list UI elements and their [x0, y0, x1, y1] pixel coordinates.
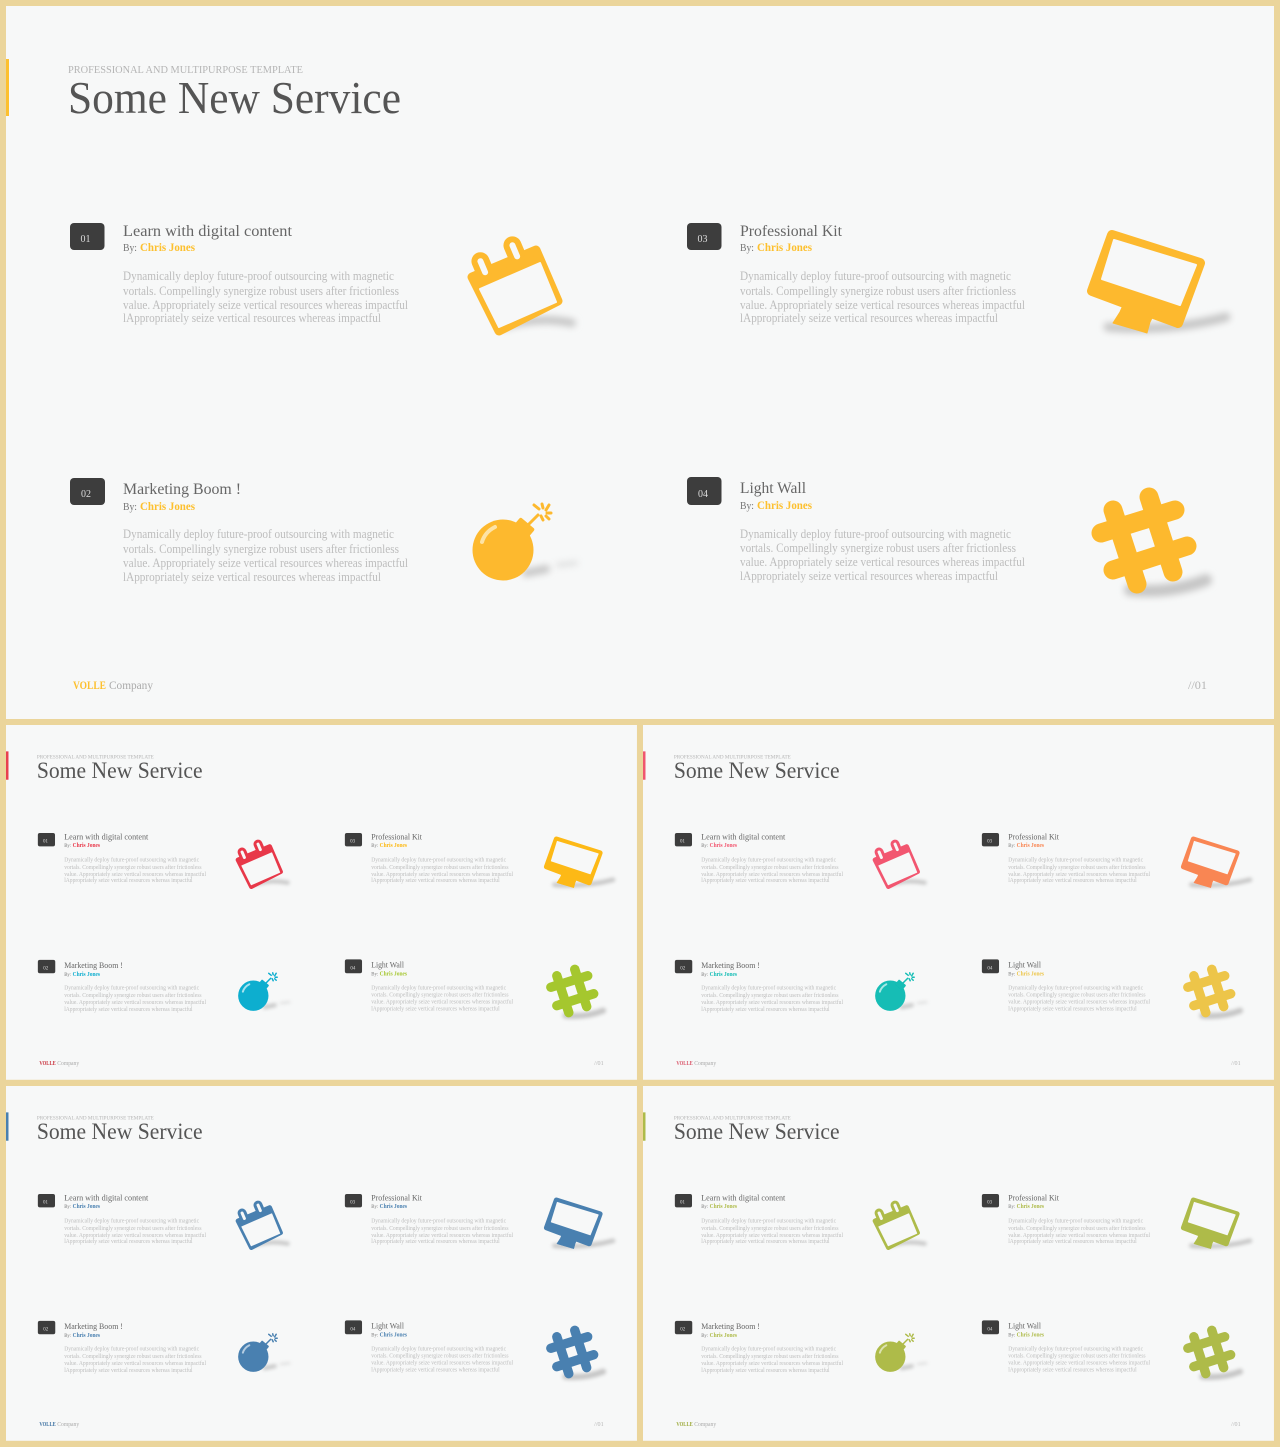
item 01: Learn with digital content: [64, 832, 149, 841]
icon: calendar: [236, 838, 288, 887]
item 01: 01: [80, 234, 90, 245]
item 03: Professional Kit: [371, 1193, 423, 1202]
item 01: 01: [43, 839, 49, 844]
icon: monitor: [1092, 235, 1226, 333]
footer brand: [676, 1422, 716, 1428]
item 04: Light Wall: [1008, 960, 1042, 969]
item 04: Dynamically deploy future-proof outsourcing with magnetic: [371, 985, 506, 992]
accent bar: [6, 1112, 8, 1141]
item 04: 04: [350, 1327, 356, 1332]
item 03: Dynamically deploy future-proof outsourcing with magnetic: [371, 1217, 506, 1224]
item 04: Dynamically deploy future-proof outsourcing with magnetic: [1008, 1346, 1143, 1353]
footer brand: Company: [694, 1061, 716, 1067]
icon: calendar: [236, 1199, 288, 1248]
item 01: lAppropriately seize vertical resources whereas impactful: [701, 877, 830, 884]
item 01: vortals. Compellingly synergize robust users after frictionless: [701, 1225, 839, 1232]
item 01: Dynamically deploy future-proof outsourcing with magnetic: [123, 269, 394, 283]
item 02: vortals. Compellingly synergize robust users after frictionless: [701, 992, 839, 999]
item 04: [982, 1320, 1150, 1374]
item 04: 04: [987, 1327, 993, 1332]
icon: hash: [551, 969, 603, 1016]
item 01: 01: [680, 1200, 686, 1205]
panel: small olive slide: [643, 1086, 1274, 1441]
page number: //01: [1231, 1061, 1241, 1067]
footer brand: VOLLE: [676, 1061, 693, 1067]
item 01: Learn with digital content: [701, 832, 786, 841]
item 04: vortals. Compellingly synergize robust users after frictionless: [371, 992, 509, 999]
icon: monitor: [1183, 1200, 1250, 1249]
item 01: lAppropriately seize vertical resources whereas impactful: [64, 877, 193, 884]
item 02: Dynamically deploy future-proof outsourcing with magnetic: [64, 985, 199, 992]
item 02: lAppropriately seize vertical resources whereas impactful: [64, 1006, 193, 1013]
item 04: Chris Jones: [757, 500, 812, 512]
item 03: vortals. Compellingly synergize robust users after frictionless: [371, 1225, 509, 1232]
item 01: value. Appropriately seize vertical resources whereas impactful: [701, 1232, 843, 1239]
icon: bomb: [472, 504, 576, 580]
item 01: Dynamically deploy future-proof outsourcing with magnetic: [64, 856, 199, 863]
item 04: Chris Jones: [380, 971, 408, 977]
item 02: Chris Jones: [73, 972, 101, 978]
item 01: By:: [64, 1204, 72, 1210]
item 03: Professional Kit: [371, 832, 423, 841]
item 04: Chris Jones: [1017, 1332, 1045, 1338]
footer brand: [39, 1061, 79, 1067]
item 03: By:: [740, 242, 754, 254]
item 01: value. Appropriately seize vertical resources whereas impactful: [64, 871, 206, 878]
item 02: vortals. Compellingly synergize robust users after frictionless: [64, 1353, 202, 1360]
item 04: lAppropriately seize vertical resources whereas impactful: [371, 1006, 500, 1013]
item 01: [675, 832, 843, 884]
item 01: vortals. Compellingly synergize robust users after frictionless: [64, 864, 202, 871]
icon: bomb: [238, 1334, 290, 1372]
item 04: Dynamically deploy future-proof outsourcing with magnetic: [740, 527, 1011, 541]
accent bar: [6, 59, 9, 116]
item 03: value. Appropriately seize vertical resources whereas impactful: [1008, 871, 1150, 878]
item 03: value. Appropriately seize vertical resources whereas impactful: [371, 1232, 513, 1239]
panel: small red slide: [6, 725, 637, 1080]
item 02: lAppropriately seize vertical resources whereas impactful: [64, 1367, 193, 1374]
item 02: Dynamically deploy future-proof outsourcing with magnetic: [123, 527, 394, 541]
item 04: By:: [371, 1332, 379, 1338]
item 03: Dynamically deploy future-proof outsourcing with magnetic: [1008, 856, 1143, 863]
item 02: vortals. Compellingly synergize robust users after frictionless: [701, 1353, 839, 1360]
item 01: By:: [701, 843, 709, 849]
item 04: Light Wall: [740, 480, 807, 497]
item 04: value. Appropriately seize vertical resources whereas impactful: [371, 1360, 513, 1367]
item 03: By:: [371, 1204, 379, 1210]
item 04: Light Wall: [371, 960, 405, 969]
footer brand: Company: [694, 1422, 716, 1428]
item 03: vortals. Compellingly synergize robust users after frictionless: [1008, 1225, 1146, 1232]
item 02: 02: [680, 1327, 686, 1332]
item 01: value. Appropriately seize vertical resources whereas impactful: [701, 871, 843, 878]
item 04: lAppropriately seize vertical resources whereas impactful: [1008, 1367, 1137, 1374]
item 02: Chris Jones: [710, 972, 738, 978]
item 01: Learn with digital content: [123, 223, 293, 240]
icon: monitor: [546, 1200, 613, 1249]
icon: monitor: [1183, 839, 1250, 888]
item 01: Dynamically deploy future-proof outsourcing with magnetic: [701, 1217, 836, 1224]
icon: calendar: [873, 838, 925, 887]
item 04: value. Appropriately seize vertical resources whereas impactful: [371, 999, 513, 1006]
panel: small coral slide: [643, 725, 1274, 1080]
item 02: Chris Jones: [710, 1333, 738, 1339]
item 03: By:: [1008, 843, 1016, 849]
item 02: Dynamically deploy future-proof outsourcing with magnetic: [701, 1346, 836, 1353]
accent bar: [643, 751, 645, 780]
item 02: value. Appropriately seize vertical resources whereas impactful: [701, 999, 843, 1006]
item 02: lAppropriately seize vertical resources whereas impactful: [701, 1367, 830, 1374]
item 01: By:: [701, 1204, 709, 1210]
eyebrow text: PROFESSIONAL AND MULTIPURPOSE TEMPLATE: [37, 1115, 154, 1121]
item 01: lAppropriately seize vertical resources whereas impactful: [123, 311, 381, 325]
item 03: 03: [987, 839, 993, 844]
footer brand: Company: [109, 678, 153, 692]
item 02: Marketing Boom !: [64, 961, 123, 970]
item 03: [345, 1193, 513, 1245]
item 03: Chris Jones: [1017, 843, 1045, 849]
item 01: [675, 1193, 843, 1245]
item 04: vortals. Compellingly synergize robust users after frictionless: [371, 1353, 509, 1360]
item 03: By:: [371, 843, 379, 849]
item 03: 03: [698, 234, 708, 245]
icon: hash: [1188, 969, 1240, 1016]
item 03: vortals. Compellingly synergize robust users after frictionless: [740, 284, 1016, 298]
eyebrow text: PROFESSIONAL AND MULTIPURPOSE TEMPLATE: [37, 754, 154, 760]
footer brand: Company: [57, 1422, 79, 1428]
item 02: By:: [123, 501, 137, 513]
item 01: Chris Jones: [710, 1204, 738, 1210]
item 03: Dynamically deploy future-proof outsourcing with magnetic: [740, 269, 1011, 283]
item 02: 02: [81, 489, 91, 500]
item 01: [70, 223, 408, 325]
item 03: [687, 223, 1025, 325]
item 01: value. Appropriately seize vertical resources whereas impactful: [64, 1232, 206, 1239]
icon: bomb: [238, 973, 290, 1011]
item 02: value. Appropriately seize vertical resources whereas impactful: [123, 556, 408, 570]
item 02: [38, 960, 206, 1013]
icon: bomb: [875, 1334, 927, 1372]
icon: hash: [1101, 497, 1206, 591]
item 04: By:: [740, 500, 754, 512]
item 04: 04: [698, 489, 708, 500]
item 03: Chris Jones: [1017, 1204, 1045, 1210]
item 02: Chris Jones: [73, 1333, 101, 1339]
item 02: [675, 1321, 843, 1374]
item 02: value. Appropriately seize vertical resources whereas impactful: [64, 1360, 206, 1367]
item 02: [70, 478, 408, 584]
icon: monitor: [546, 839, 613, 888]
item 02: [675, 960, 843, 1013]
page number: //01: [594, 1422, 604, 1428]
item 02: Dynamically deploy future-proof outsourcing with magnetic: [64, 1346, 199, 1353]
item 04: Chris Jones: [1017, 971, 1045, 977]
item 01: [38, 832, 206, 884]
item 04: lAppropriately seize vertical resources whereas impactful: [371, 1367, 500, 1374]
footer brand: Company: [57, 1061, 79, 1067]
item 04: 04: [987, 966, 993, 971]
item 01: value. Appropriately seize vertical resources whereas impactful: [123, 298, 408, 312]
item 03: 03: [350, 839, 356, 844]
item 03: lAppropriately seize vertical resources whereas impactful: [740, 311, 998, 325]
item 04: lAppropriately seize vertical resources whereas impactful: [740, 569, 998, 583]
item 03: lAppropriately seize vertical resources whereas impactful: [371, 1238, 500, 1245]
item 02: Chris Jones: [140, 501, 195, 513]
item 01: 01: [680, 839, 686, 844]
icon: bomb: [875, 973, 927, 1011]
item 03: vortals. Compellingly synergize robust users after frictionless: [1008, 864, 1146, 871]
item 01: lAppropriately seize vertical resources whereas impactful: [64, 1238, 193, 1245]
item 01: vortals. Compellingly synergize robust users after frictionless: [64, 1225, 202, 1232]
item 02: 02: [43, 1327, 49, 1332]
item 01: Learn with digital content: [701, 1193, 786, 1202]
item 02: vortals. Compellingly synergize robust users after frictionless: [64, 992, 202, 999]
eyebrow text: PROFESSIONAL AND MULTIPURPOSE TEMPLATE: [674, 1115, 791, 1121]
footer brand: [39, 1422, 79, 1428]
item 02: Marketing Boom !: [701, 961, 760, 970]
item 04: value. Appropriately seize vertical resources whereas impactful: [740, 555, 1025, 569]
item 04: [982, 959, 1150, 1013]
item 04: vortals. Compellingly synergize robust users after frictionless: [740, 541, 1016, 555]
item 04: vortals. Compellingly synergize robust users after frictionless: [1008, 992, 1146, 999]
item 04: By:: [1008, 971, 1016, 977]
footer brand: [676, 1061, 716, 1067]
item 04: value. Appropriately seize vertical resources whereas impactful: [1008, 999, 1150, 1006]
item 02: [38, 1321, 206, 1374]
item 04: lAppropriately seize vertical resources whereas impactful: [1008, 1006, 1137, 1013]
item 03: value. Appropriately seize vertical resources whereas impactful: [740, 298, 1025, 312]
item 01: Chris Jones: [140, 242, 195, 254]
item 01: Dynamically deploy future-proof outsourcing with magnetic: [701, 856, 836, 863]
item 02: 02: [680, 966, 686, 971]
footer brand: VOLLE: [73, 680, 106, 692]
item 02: By:: [701, 972, 709, 978]
accent bar: [6, 751, 8, 780]
item 01: [38, 1193, 206, 1245]
item 01: Chris Jones: [73, 843, 101, 849]
item 03: 03: [987, 1200, 993, 1205]
item 03: lAppropriately seize vertical resources whereas impactful: [371, 877, 500, 884]
item 03: value. Appropriately seize vertical resources whereas impactful: [1008, 1232, 1150, 1239]
item 01: Chris Jones: [73, 1204, 101, 1210]
page number: //01: [1188, 680, 1207, 692]
item 04: Light Wall: [371, 1321, 405, 1330]
eyebrow text: PROFESSIONAL AND MULTIPURPOSE TEMPLATE: [674, 754, 791, 760]
item 02: Dynamically deploy future-proof outsourcing with magnetic: [701, 985, 836, 992]
icon: calendar: [469, 234, 572, 331]
item 03: Professional Kit: [1008, 832, 1060, 841]
icon: hash: [551, 1330, 603, 1377]
accent bar: [643, 1112, 645, 1141]
item 01: By:: [64, 843, 72, 849]
item 04: [345, 1320, 513, 1374]
title: Some New Service: [37, 758, 203, 783]
item 04: value. Appropriately seize vertical resources whereas impactful: [1008, 1360, 1150, 1367]
item 03: lAppropriately seize vertical resources whereas impactful: [1008, 877, 1137, 884]
item 03: Chris Jones: [757, 242, 812, 254]
item 04: By:: [371, 971, 379, 977]
item 02: By:: [64, 972, 72, 978]
item 02: Marketing Boom !: [701, 1322, 760, 1331]
title: Some New Service: [674, 758, 840, 783]
item 02: Marketing Boom !: [64, 1322, 123, 1331]
item 04: [345, 959, 513, 1013]
eyebrow text: PROFESSIONAL AND MULTIPURPOSE TEMPLATE: [68, 64, 303, 76]
page number: //01: [1231, 1422, 1241, 1428]
item 02: lAppropriately seize vertical resources whereas impactful: [123, 570, 381, 584]
item 02: lAppropriately seize vertical resources whereas impactful: [701, 1006, 830, 1013]
item 04: 04: [350, 966, 356, 971]
item 04: [687, 477, 1025, 583]
item 04: Dynamically deploy future-proof outsourcing with magnetic: [1008, 985, 1143, 992]
item 02: By:: [64, 1333, 72, 1339]
item 01: vortals. Compellingly synergize robust users after frictionless: [701, 864, 839, 871]
title: Some New Service: [674, 1119, 840, 1144]
item 03: Chris Jones: [380, 843, 408, 849]
item 04: Light Wall: [1008, 1321, 1042, 1330]
item 03: lAppropriately seize vertical resources whereas impactful: [1008, 1238, 1137, 1245]
icon: hash: [1188, 1330, 1240, 1377]
item 03: Professional Kit: [740, 223, 843, 240]
item 03: [345, 832, 513, 884]
item 03: vortals. Compellingly synergize robust users after frictionless: [371, 864, 509, 871]
item 03: [982, 832, 1150, 884]
item 03: value. Appropriately seize vertical resources whereas impactful: [371, 871, 513, 878]
icon: calendar: [873, 1199, 925, 1248]
item 03: Chris Jones: [380, 1204, 408, 1210]
item 01: 01: [43, 1200, 49, 1205]
footer brand: VOLLE: [39, 1061, 56, 1067]
footer brand: VOLLE: [676, 1422, 693, 1428]
page number: //01: [594, 1061, 604, 1067]
item 01: lAppropriately seize vertical resources whereas impactful: [701, 1238, 830, 1245]
item 03: By:: [1008, 1204, 1016, 1210]
item 02: value. Appropriately seize vertical resources whereas impactful: [64, 999, 206, 1006]
item 02: By:: [701, 1333, 709, 1339]
item 04: Chris Jones: [380, 1332, 408, 1338]
footer brand: [73, 678, 153, 692]
panel: large amber slide: [6, 6, 1274, 719]
item 01: By:: [123, 242, 137, 254]
item 01: Learn with digital content: [64, 1193, 149, 1202]
item 01: Chris Jones: [710, 843, 738, 849]
item 03: [982, 1193, 1150, 1245]
item 02: vortals. Compellingly synergize robust users after frictionless: [123, 542, 399, 556]
item 03: Professional Kit: [1008, 1193, 1060, 1202]
item 03: 03: [350, 1200, 356, 1205]
item 04: By:: [1008, 1332, 1016, 1338]
item 02: Marketing Boom !: [123, 481, 241, 498]
item 01: vortals. Compellingly synergize robust users after frictionless: [123, 284, 399, 298]
footer brand: VOLLE: [39, 1422, 56, 1428]
title: Some New Service: [37, 1119, 203, 1144]
item 04: Dynamically deploy future-proof outsourcing with magnetic: [371, 1346, 506, 1353]
title: Some New Service: [68, 72, 401, 123]
item 03: Dynamically deploy future-proof outsourcing with magnetic: [1008, 1217, 1143, 1224]
item 03: Dynamically deploy future-proof outsourcing with magnetic: [371, 856, 506, 863]
item 04: vortals. Compellingly synergize robust users after frictionless: [1008, 1353, 1146, 1360]
panel: small blue slide: [6, 1086, 637, 1441]
item 01: Dynamically deploy future-proof outsourcing with magnetic: [64, 1217, 199, 1224]
item 02: 02: [43, 966, 49, 971]
item 02: value. Appropriately seize vertical resources whereas impactful: [701, 1360, 843, 1367]
